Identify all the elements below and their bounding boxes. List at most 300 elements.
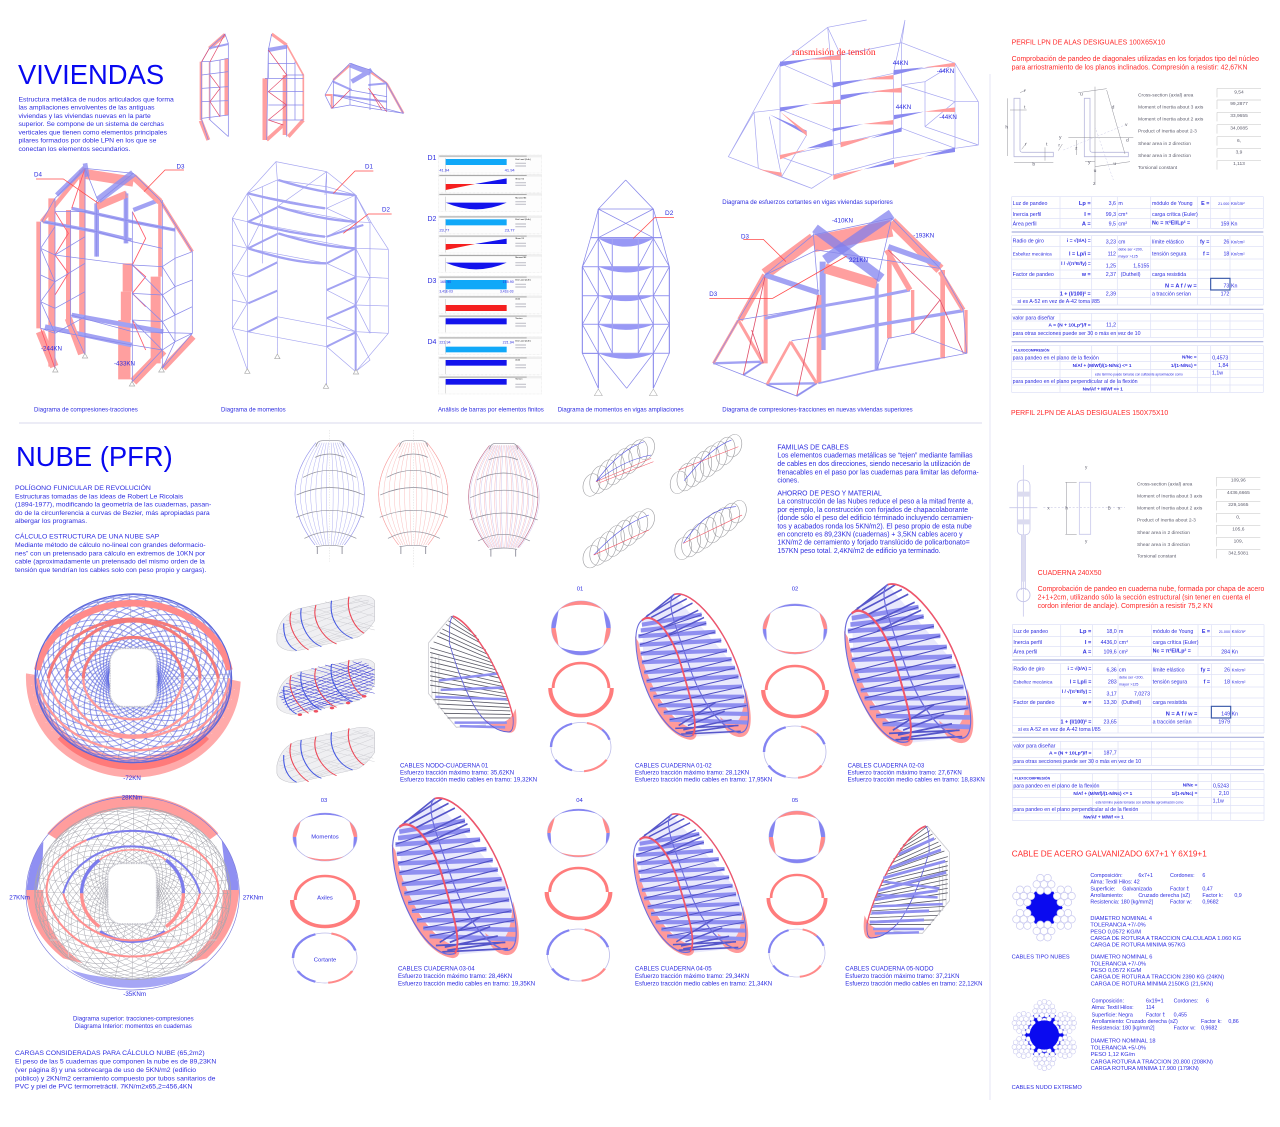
section properties table: LPN: Shear area in 3 direction (1138, 153, 1191, 159)
element D4: Torsion (515, 378, 523, 381)
drum 03-04 (392, 798, 519, 958)
cable drums (392, 584, 973, 958)
drum nodo-cuadera 01 (428, 616, 517, 733)
heading: cuaderna 240x50: cordon inferior de anclaje). Compresión a resistir 75,2 KN (1038, 603, 1213, 610)
section properties table: LPN: Product of Inertia about 2-3 (1138, 128, 1197, 134)
calculation table 1: LPN buckling: cm² (1118, 222, 1127, 228)
calculation table 2: cuaderna buckling: 1979 (1218, 719, 1230, 725)
callouts D4 D3 (36, 170, 184, 203)
calculation table 2: cuaderna buckling: Inercia perfil (1013, 640, 1042, 646)
text block: cargas consideradas: El peso de las 5 cuadernas que componen la nube es de 89,23KN (15, 1058, 216, 1066)
labels: tension and shear values: -44KN (937, 68, 954, 75)
element D2: 23,77 (505, 228, 515, 233)
barrel blue (295, 430, 364, 562)
labels: bottom view values: 27KNm (243, 894, 263, 902)
caption: cables cuaderna 01-02: Esfuerzo tracción máximo tramo: 28,12KN (635, 770, 749, 776)
heading: perfil LPN 100x65x10: Comprobación de pandeo de diagonales utilizadas en los forjados tipo del núcleo (1012, 56, 1259, 63)
calculation table 2: cuaderna buckling: carga resistida (1153, 700, 1187, 706)
text block: cargas consideradas (15, 1048, 216, 1090)
calculation table 2: cuaderna buckling: 0,5243 (1213, 783, 1229, 789)
caption: cables cuaderna 04-05 (635, 966, 772, 987)
section diagram: 2LPN and cuaderna: B (1108, 505, 1111, 510)
labels: upper housing forces (709, 218, 934, 298)
calculation table 1: LPN buckling: 11,2 (1106, 323, 1116, 329)
text block: cable 6x19+1 specs: CARGA ROTURA MINIMA 17.900 (179KN) (1091, 1066, 1199, 1072)
text block: cable 6x19+1 specs: Cordones: (1174, 998, 1198, 1004)
cuaderna diagrams column 03 (292, 813, 358, 983)
section properties table: 2LPN: Torsional constant (1137, 554, 1177, 560)
labels: D1 D2: D1 (365, 164, 373, 171)
truss view 2 (265, 34, 303, 140)
text block: cargas consideradas: CARGAS CONSIDERADAS PARA CÁLCULO NUBE (65,2m2) (15, 1048, 205, 1057)
caption: cables cuaderna 04-05: CABLES CUADERNA 04-05 (635, 966, 712, 973)
calculation table 1: LPN buckling: fy = (1200, 240, 1209, 246)
heading: cuaderna 240x50: 2+1+2cm, utilizando sólo la sección estructural (sin tener en cuenta el (1038, 595, 1251, 602)
section properties table: 2LPN: Shear area in 2 direction (1137, 530, 1190, 536)
text block: familias de cables (777, 444, 979, 555)
calculation table 1: LPN buckling: 3,6 (1109, 201, 1116, 207)
text block: cable 6x19+1 specs: Alma: Textil Hilos: (1092, 1005, 1134, 1011)
calculation table 1: LPN buckling: si es A-52 en vez de A-42 toma l/85 (1017, 299, 1100, 305)
section properties table: 2LPN: 342,5081 (1228, 550, 1249, 556)
drum 04-05 (633, 814, 748, 956)
labels: D1 to D4: D1 (428, 155, 437, 162)
element D4: 221.94 (503, 340, 514, 344)
element D2 (438, 216, 542, 272)
caption: cables cuaderna 05-nodo: CABLES CUADERNA 05-NODO (845, 966, 934, 973)
calculation table 1: LPN buckling: Nc = π²EI/Lp² = (1152, 221, 1190, 227)
text block: familias de cables: FAMILIAS DE CABLES (777, 444, 849, 452)
caption: cables cuaderna 02-03: CABLES CUADERNA 02-03 (848, 762, 925, 769)
calculation table 1: LPN buckling: límite elástico (1152, 240, 1184, 246)
section diagram: 2LPN and cuaderna: h (1065, 505, 1068, 510)
text block: cable 6x7+1 specs: Factor f: (1170, 886, 1190, 892)
barrel red (379, 430, 448, 567)
calculation table 2: cuaderna buckling: Luz de pandeo (1013, 629, 1048, 635)
calculation table 2: cuaderna buckling: Factor de pandeo (1013, 700, 1055, 706)
calculation table 2: cuaderna buckling: debe ser <200, (1119, 675, 1144, 679)
labels: bottom view values: 28KNm (122, 794, 142, 802)
caption: cables cuaderna 01-02 (635, 762, 772, 784)
text block: familias de cables: AHORRO DE PESO Y MATERIAL (777, 490, 882, 497)
calculation table 1: LPN buckling: 112 (1108, 252, 1116, 258)
text block: cable 6x19+1 specs: 0,455 (1174, 1012, 1187, 1018)
text block: familias de cables: ciones. (777, 478, 799, 485)
element D1: 41.94 (439, 167, 450, 172)
calculation table 2: cuaderna buckling: Kn/cm² (1232, 629, 1246, 634)
caption: cables nodo-cuaderna 01 (400, 762, 537, 784)
heading: perfil 2LPN: PERFIL 2LPN DE ALAS DESIGUALES 150X75X10 (1011, 410, 1168, 417)
section properties table: LPN: 34,0085 (1230, 125, 1248, 131)
section diagram: L angle: y (1088, 160, 1091, 166)
text block: cable 6x19+1 specs: 0,9682 (1201, 1026, 1217, 1032)
calculation table 2: cuaderna buckling: 26 (1224, 668, 1230, 674)
small truss views: three perspectives (201, 34, 403, 140)
text block: cable 6x7+1 specs (1012, 873, 1242, 987)
calculation table 2: cuaderna buckling: i = √(I/A) = (1068, 666, 1091, 672)
calculation table 1: LPN buckling: 21.000 (1218, 202, 1229, 206)
text block: familias de cables: La construcción de las Nubes reduce el peso a la mitad frente a, (777, 499, 973, 506)
text block: familias de cables: tos y acabados ronda los 5KN/m2). El peso propio de esta nube (777, 523, 972, 530)
calculation table 1: LPN buckling: Factor de pandeo (1013, 272, 1054, 278)
section properties table: 2LPN: Cross-section (axial) area (1137, 482, 1193, 488)
labels: upper housing forces: D3 (741, 233, 749, 240)
text block: cable 6x7+1 specs: TOLERANCIA +7/-0% (1090, 923, 1146, 929)
element D4: Axial (515, 358, 521, 361)
text block: viviendas description: pilares formados por doble LPN en los que se (18, 138, 157, 145)
caption: cables cuaderna 01-02: Esfuerzo tracción medio cables en tramo: 17,95KN (635, 776, 772, 784)
text block: cable 6x7+1 specs: Factor w: (1170, 900, 1192, 906)
text block: viviendas description: viviendas y las viviendas nuevas en la parte (18, 113, 151, 120)
element D1 (438, 155, 542, 211)
element D3 (438, 276, 542, 333)
section diagram: L angle: u (1094, 168, 1097, 174)
section diagram: L angle: r (1024, 88, 1026, 94)
helical view 1 (581, 436, 656, 497)
text block: viviendas description: conectan los elementos secundarios. (18, 146, 130, 153)
calculation table 2: cuaderna buckling: Nc = π²EI/Lp² = (1153, 649, 1191, 655)
label -72KN: -72KN (123, 775, 141, 782)
text block: familias de cables: (donde sólo el peso del edificio términado incluyendo cerramien- (777, 515, 973, 522)
calculation table 1: LPN buckling: Kn (1231, 222, 1237, 228)
section diagram: L angle: r (1058, 143, 1060, 149)
text block: familias de cables: en concreto es 89,23KN (cuadernas) + 3,5KN cables acero y (777, 532, 963, 539)
section properties table: LPN (1138, 88, 1261, 171)
calculation table 1: LPN buckling: 1,25 (1106, 264, 1116, 270)
calculation table 1: LPN buckling: para pandeo en el plano de la flexión (1013, 355, 1099, 361)
section properties table: LPN: 33,9655 (1230, 113, 1248, 119)
calculation table 2: cuaderna buckling: mayor >125 (1119, 682, 1138, 686)
text block: poligono funicular: Estructuras tomadas de las ideas de Robert Le Ricolais (15, 493, 184, 500)
labels: D1 to D4: D3 (428, 278, 437, 285)
calculation table 2: cuaderna buckling: (Dutheil) (1121, 700, 1141, 706)
element D1: Dist Load (2-dir) (515, 158, 531, 161)
calculation table 1: LPN buckling: Área perfil (1013, 221, 1037, 228)
labels: bottom view values: -35KNm (123, 991, 146, 998)
section properties table: LPN: Moment of Inertia about 2 axis (1138, 117, 1204, 123)
calculation table 2: cuaderna buckling: 3,17 (1106, 692, 1117, 698)
calculation table 2: cuaderna buckling: si es A-52 en vez de A-42 toma l/85 (1018, 727, 1101, 733)
section diagram: L angle: z (1075, 145, 1078, 151)
calculation table 1: LPN buckling: carga crítica (Euler) (1152, 212, 1198, 218)
calculation table 1: LPN buckling: 159 (1221, 222, 1229, 228)
text block: poligono funicular: tensión que tendrían los cables solo con peso propio y cargas). (15, 567, 206, 574)
caption: cables cuaderna 03-04: Esfuerzo tracción máximo tramo: 28,46KN (398, 973, 512, 980)
labels: upper housing forces: -410KN (832, 218, 853, 225)
calculation table 1: LPN buckling: Esbeltez mecánica (1013, 252, 1052, 257)
text block: cable 6x19+1 specs: CARGA ROTURA A TRACCION 20.800 (208KN) (1091, 1059, 1213, 1065)
element D3: 165.90 (440, 280, 451, 284)
calculation table 1: LPN buckling: Kn/cm² (1231, 240, 1245, 245)
labels: cuaderna numbers and ring names: Momentos (311, 835, 339, 841)
calculation table 2: cuaderna buckling: para pandeo en el plano perpendicular al de la flexión (1013, 807, 1138, 813)
calculation table 2: cuaderna buckling: Radio de giro (1013, 667, 1045, 673)
labels: cuaderna numbers and ring names: 01 (577, 587, 583, 593)
section properties table: LPN: Torsional constant (1138, 165, 1178, 171)
label D2: D2 (665, 210, 674, 217)
calculation table 2: cuaderna buckling: 1/(1-N/Nc) = (1172, 791, 1198, 796)
labels: upper housing forces: D3 (709, 291, 718, 298)
calculation table 1: LPN buckling (1012, 197, 1263, 392)
truss view 3 (325, 63, 403, 113)
text block: viviendas description: verticales que tienen como elementos principales (18, 129, 168, 136)
caption: cables nodo-cuaderna 01: Esfuerzo tracción máximo tramo: 35,62KN (400, 770, 514, 776)
text block: cable 6x7+1 specs: Galvanizada (1122, 886, 1152, 892)
calculation table 2: cuaderna buckling: fy = (1201, 668, 1210, 674)
element D3: 3,41E-03 (500, 290, 514, 294)
heading: cable de acero: CABLE DE ACERO GALVANIZADO 6X7+1 Y 6X19+1 (1012, 850, 1207, 859)
section properties table: 2LPN: 229,1665 (1228, 502, 1249, 508)
labels: D1 D2 (365, 164, 390, 214)
calculation table 2: cuaderna buckling: 1 + (l/100)² = (1061, 719, 1091, 725)
calculation table 2: cuaderna buckling: 149 (1221, 711, 1230, 717)
text block: cargas consideradas: PVC y piel de PVC termorretráctil. 7KN/m2x65,2=456,4KN (15, 1084, 193, 1090)
calculation table 1: LPN buckling: a tracción serían (1152, 291, 1191, 297)
section diagram: L angle: y (1059, 135, 1062, 141)
caption: Diagrama de compresiones-tracciones (34, 408, 138, 414)
calculation table 2: cuaderna buckling: A = (1083, 650, 1092, 656)
section diagram: L angle: d (1112, 105, 1115, 111)
labels: compresiones diagram: D4 (34, 172, 42, 178)
text block: cable 6x7+1 specs: 0,9682 (1202, 900, 1219, 906)
calculation table 1: LPN buckling: carga resistida (1152, 272, 1186, 278)
heading: perfil LPN 100x65x10: para arriostramiento de los planos inclinados. Compresión a resistir: 42,67KN (1012, 64, 1247, 71)
diagram: momentos vigas ampliaciones (582, 180, 674, 396)
caption: cables cuaderna 05-nodo: Esfuerzo tracción medio cables en tramo: 22,12KN (845, 980, 982, 987)
calculation table 1: LPN buckling: I = (1084, 212, 1091, 218)
text block: cable 6x19+1 specs: 0,86 (1228, 1019, 1239, 1025)
caption: cables cuaderna 05-nodo: Esfuerzo tracción máximo tramo: 37,21KN (845, 973, 959, 980)
text block: cable 6x19+1 specs: Factor w: (1174, 1026, 1196, 1032)
calculation table 2: cuaderna buckling: Nw/Af + M/Wf <= 1 (1083, 815, 1124, 820)
text block: poligono funicular: nes” con un pretensado para cálculo en extremos de 10KN por (15, 550, 206, 557)
caption: cables cuaderna 01-02: CABLES CUADERNA 01-02 (635, 762, 712, 769)
calculation table 2: cuaderna buckling: A = (N + 10Lp²)/f = (1049, 751, 1091, 757)
text block: poligono funicular: Mediante método de cálculo no-lineal con grandes deformacio- (15, 542, 206, 549)
diagram: momentos truss (232, 162, 392, 388)
element D3: Torsion (515, 317, 523, 320)
calculation table 2: cuaderna buckling: para otras secciones puede ser 30 o más en vez de 10 (1013, 759, 1141, 765)
text block: cable 6x19+1 specs: PESO 1,12 KG/m (1091, 1052, 1135, 1058)
text block: cable 6x7+1 specs: Resistencia: 180 [kg/mm2] (1090, 900, 1154, 906)
text block: cable 6x7+1 specs: CARGA DE ROTURA MINIMA 957KG (1090, 943, 1186, 949)
section properties table: LPN: 1,113 (1233, 161, 1245, 167)
capsule 3 (277, 727, 375, 783)
caption: Diagrama de momentos (221, 408, 286, 414)
section diagram: L angle: z (1093, 181, 1096, 187)
calculation table 1: LPN buckling: Luz de pandeo (1013, 201, 1047, 207)
text block: cable 6x7+1 specs: DIAMETRO NOMINAL 6 (1091, 955, 1152, 961)
section diagram: L angle: t (1046, 141, 1048, 147)
calculation table 2: cuaderna buckling: N/Af + (M/Wf)/(1-N/Nc) <= 1 (1073, 791, 1133, 796)
caption: nube diagrams: Diagrama Interior: momentos en cuadernas (75, 1024, 192, 1030)
heading: cuaderna 240x50: CUADERNA 240X50 (1038, 570, 1102, 577)
calculation table 2: cuaderna buckling: 6,36 (1106, 668, 1117, 674)
text block: cable 6x19+1 specs: 6x19+1 (1146, 998, 1164, 1004)
text block: viviendas description: las ampliaciones envolventes de las antiguas (18, 105, 155, 112)
calculation table 2: cuaderna buckling: este término puede tomarse con suficiente aproximación como (1096, 800, 1184, 804)
calculation table 1: LPN buckling: m (1118, 201, 1123, 207)
text block: cable 6x7+1 specs: Factor k: (1202, 893, 1223, 899)
calculation table 2: cuaderna buckling: FLEXOCOMPRESIÓN (1015, 775, 1051, 780)
calculation table 2: cuaderna buckling: 283 (1108, 680, 1117, 686)
labels: cuaderna numbers and ring names: 05 (792, 798, 799, 804)
labels: cuaderna numbers and ring names: 04 (576, 798, 583, 804)
calculation table 2: cuaderna buckling: 21.000 (1219, 630, 1230, 634)
text block: poligono funicular (15, 483, 211, 574)
element D3: Axial (515, 298, 521, 301)
section properties table: 2LPN: 109,96 (1231, 478, 1246, 484)
text block: cable 6x7+1 specs: 6 (1202, 873, 1205, 879)
text block: familias de cables: por ejemplo, la construcción con forjados de chapacolaborante (777, 507, 968, 514)
text block: cable 6x19+1 specs (1012, 998, 1239, 1091)
labels: D1 to D4: D2 (428, 216, 437, 223)
calculation table 2: cuaderna buckling: valor para diseñar (1013, 743, 1056, 749)
calculation table 1: LPN buckling: (Dutheil) (1121, 272, 1141, 278)
labels: compresiones diagram: D3 (176, 164, 185, 171)
section properties table: LPN: Cross-section (axial) area (1138, 93, 1194, 99)
calculation table 2: cuaderna buckling: 4436,0 (1101, 640, 1117, 646)
callouts D3 (709, 239, 847, 298)
element D3: Dist Load (2-dir) (515, 279, 531, 282)
text block: poligono funicular: albergar los programas. (15, 518, 87, 525)
diagram: nube top view tracciones-compresiones (17, 579, 249, 778)
labels: bottom view values (9, 794, 263, 998)
heading: cuaderna 240x50: Comprobación de pandeo en cuaderna nube, formada por chapa de acero (1038, 586, 1264, 593)
title: VIVIENDAS: VIVIENDAS (18, 59, 164, 90)
labels: D1 D2: D2 (382, 207, 390, 214)
caption: cables cuaderna 02-03 (848, 762, 985, 784)
calculation table 1: LPN buckling: i = √(I/A) = (1067, 238, 1091, 244)
calculation table 2: cuaderna buckling: cm (1119, 668, 1127, 674)
text block: cable 6x19+1 specs: TOLERANCIA +5/-0% (1091, 1045, 1146, 1051)
text block: cargas consideradas: público) y 2KN/m2 cerramiento compuesto por tubos sanitarios de (15, 1075, 216, 1082)
calculation table 1: LPN buckling: N/Nc = (1182, 355, 1197, 360)
caption: cables cuaderna 03-04: CABLES CUADERNA 03-04 (398, 966, 475, 973)
text block: cable 6x19+1 specs: 114 (1146, 1005, 1155, 1011)
text block: cable 6x7+1 specs: 0,47 (1202, 886, 1213, 892)
caption: Diagrama de esfuerzos cortantes en vigas viviendas superiores (722, 200, 893, 206)
section diagram: L angle: b (1032, 161, 1035, 167)
helical view 3 (581, 508, 656, 569)
text block: viviendas description: Estructura metálica de nudos articulados que forma (18, 96, 174, 104)
section diagram: L angle: r (1025, 141, 1027, 147)
labels: upper housing forces: -193KN (913, 232, 934, 239)
calculation table 2: cuaderna buckling: 187,7 (1104, 751, 1117, 757)
calculation table 2: cuaderna buckling: 1,1w (1213, 799, 1224, 805)
heading: cuaderna 240x50 (1038, 570, 1264, 610)
labels: cuaderna numbers and ring names: 02 (792, 587, 798, 593)
text block: familias de cables: 157KN peso total. 2,4KN/m2 de edificio ya terminado. (777, 548, 941, 555)
labels: tension and shear values: 44KN (896, 104, 911, 111)
calculation table 2: cuaderna buckling: 18,0 (1106, 629, 1117, 635)
calculation table 1: LPN buckling: tensión segura (1152, 252, 1187, 258)
calculation table 1: LPN buckling: 1/(1-N/Nc) = (1171, 363, 1197, 368)
text block: cable 6x19+1 specs: Superficie: Negra (1092, 1012, 1133, 1018)
labels: D1 to D4: D4 (428, 339, 437, 346)
element D3: 165.90 (503, 280, 514, 284)
calculation table 1: LPN buckling: 1,1w (1212, 371, 1223, 377)
icon: cable 6x19+1 cross-section (1012, 999, 1077, 1071)
text block: cable 6x7+1 specs: CARGA DE ROTURA MINIMA 2150KG (21,5KN) (1091, 981, 1213, 987)
calculation table 2: cuaderna buckling: l / √(π²E/fy) = (1062, 689, 1092, 695)
element D1: 41.94 (505, 167, 515, 172)
section properties table: 2LPN (1137, 477, 1260, 560)
section properties table: 2LPN: Product of Inertia about 2-3 (1137, 517, 1196, 523)
calculation table 1: LPN buckling: módulo de Young (1152, 201, 1193, 207)
labels: D1 to D4 (428, 155, 437, 346)
calculation table 1: LPN buckling: 2,39 (1106, 291, 1116, 297)
text block: cable 6x7+1 specs: Superficie: (1090, 886, 1116, 892)
drum 02-03 (844, 584, 973, 746)
capsule 1 (277, 596, 375, 651)
text block: cable 6x19+1 specs: DIAMETRO NOMINAL 18 (1091, 1039, 1156, 1045)
text block: cable 6x7+1 specs: Cordones: (1170, 873, 1195, 879)
labels: tension and shear values: ransmisión de tensión (792, 47, 876, 58)
calculation table 1: LPN buckling: w = (1081, 272, 1091, 278)
helical view 2 (668, 434, 744, 494)
element D4: 221.94 (439, 340, 451, 344)
labels: cuaderna numbers and ring names (311, 587, 799, 964)
element D2: Moment M3 (515, 256, 527, 259)
caption: cables cuaderna 02-03: Esfuerzo tracción máximo tramo: 27,67KN (848, 770, 962, 776)
diagram: nube bottom view momentos (17, 791, 249, 995)
calculation table 1: LPN buckling: para otras secciones puede ser 30 o más en vez de 10 (1013, 331, 1141, 337)
element D2: Dist Load (2-dir) (515, 218, 531, 221)
calculation table 1: LPN buckling: Radio de giro (1013, 239, 1044, 245)
drum 05-nodo (864, 826, 950, 939)
calculation table 2: cuaderna buckling: 18 (1224, 680, 1230, 686)
text block: cable 6x7+1 specs: TOLERANCIA +7/-0% (1091, 961, 1146, 967)
helical capsules: three cable solids (277, 596, 375, 783)
section properties table: LPN: 3,9 (1236, 150, 1243, 156)
icon: cable 6x7+1 cross-section (1013, 874, 1075, 941)
text block: poligono funicular: (1894-1977), modificando la geometría de las cuadernas, pasan- (15, 502, 211, 509)
calculation table 1: LPN buckling: Inercia perfil (1013, 212, 1041, 218)
divider lines (19, 74, 990, 1100)
text block: familias de cables: Los elementos cuadernas metálicas se “tejen” mediante familias (777, 453, 973, 460)
section properties table: 2LPN: Moment of Inertia about 3 axis (1137, 493, 1203, 499)
section diagram: L angle: u (1080, 91, 1083, 97)
calculation table 2: cuaderna buckling: 2,10 (1219, 791, 1229, 797)
text block: cable 6x19+1 specs: Factor k: (1201, 1019, 1222, 1025)
calculation table 1: LPN buckling: 99,3 (1106, 212, 1116, 218)
section properties table: LPN: 99,2877 (1230, 101, 1248, 107)
caption: Diagrama de momentos en vigas ampliaciones (558, 408, 684, 414)
labels: tension and shear values (792, 47, 957, 121)
calculation table 1: LPN buckling: A = (1082, 222, 1091, 228)
text block: cable 6x19+1 specs: 6 (1206, 998, 1209, 1004)
capsule 2 (277, 659, 375, 716)
element D4 (438, 337, 542, 394)
section properties table: 2LPN: Shear area in 3 direction (1137, 542, 1190, 548)
calculation table 2: cuaderna buckling: l = Lp/i = (1070, 680, 1091, 686)
text block: familias de cables: frenacables en el paso por las cuadernas para limitar las deforma- (777, 469, 979, 476)
calculation table 2: cuaderna buckling: N = A f / w = (1166, 711, 1198, 717)
nube elevations: three barrels (295, 430, 539, 567)
section properties table: 2LPN: 4436,6665 (1227, 490, 1250, 496)
labels: tension and shear values: -44KN (939, 114, 957, 121)
section properties table: LPN: 6, (1237, 138, 1241, 144)
caption: Diagrama de compresiones-tracciones en nuevas viviendas superiores (722, 408, 913, 414)
calculation table 2: cuaderna buckling: Lp = (1080, 629, 1092, 635)
text block: cable 6x7+1 specs: CABLES TIPO NUBES (1012, 955, 1070, 961)
labels: cuaderna numbers and ring names: Cortante (314, 958, 337, 964)
calculation table 1: LPN buckling: l = Lp/i = (1069, 252, 1091, 258)
section properties table: LPN: Moment of Inertia about 3 axis (1138, 105, 1204, 111)
text block: poligono funicular: POLÍGONO FUNICULAR DE REVOLUCIÓN (15, 483, 151, 492)
element D3: 3,41E-03 (439, 290, 453, 294)
